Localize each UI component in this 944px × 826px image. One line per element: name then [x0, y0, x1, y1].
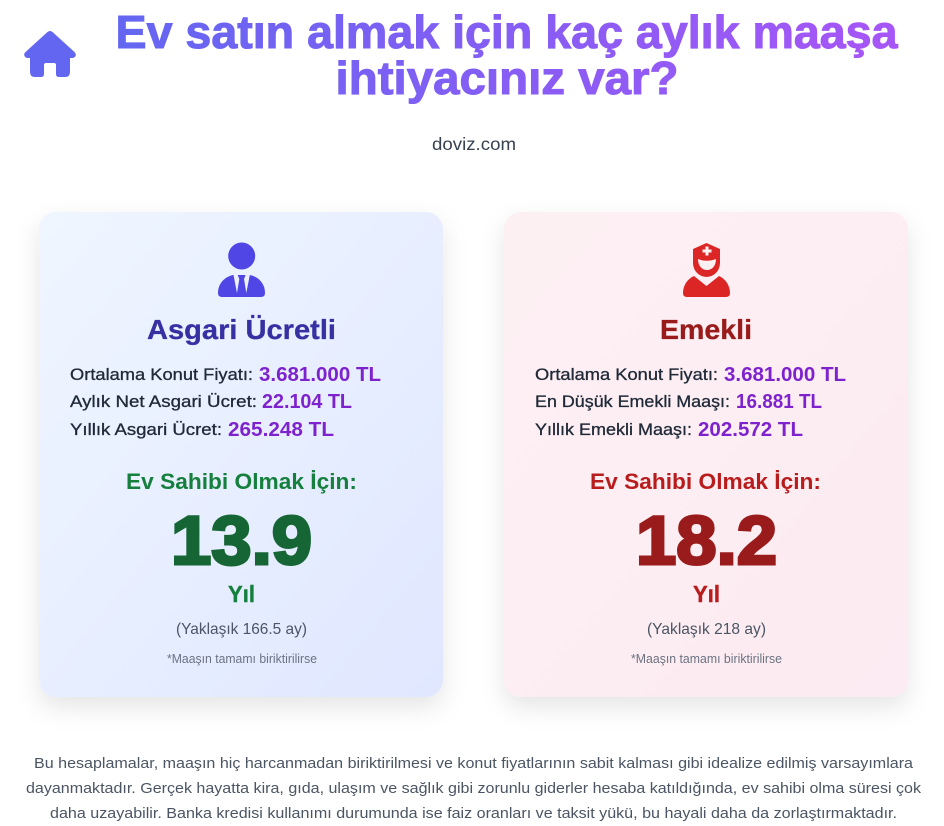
result number: 13.9 — [171, 502, 312, 579]
footer paragraph — [26, 755, 922, 822]
icon: house — [24, 31, 76, 77]
result heading: Ev Sahibi Olmak İçin: — [590, 469, 821, 494]
title: Ev satın almak için kaç aylık maaşa — [116, 6, 898, 58]
stat rows: 3.681.000 TL — [724, 364, 846, 386]
icon: nurse — [683, 243, 730, 297]
panel: emekli — [504, 212, 908, 697]
stat rows: 22.104 TL — [262, 391, 352, 413]
result unit: Yıl — [228, 581, 255, 607]
stat rows — [535, 364, 846, 441]
heading: emekli: Emekli — [660, 314, 752, 345]
stat rows — [70, 364, 381, 441]
stat rows: 16.881 TL — [736, 391, 822, 413]
footnote: *Maaşın tamamı biriktirilirse — [167, 652, 317, 666]
stat rows: 3.681.000 TL — [259, 364, 381, 386]
result number: 18.2 — [636, 502, 777, 579]
stat rows: 202.572 TL — [698, 419, 803, 441]
footer paragraph: Bu hesaplamalar, maaşın hiç harcanmadan biriktirilmesi ve konut fiyatlarının sabit kalması gibi idealize edilmiş varsayımlara — [34, 755, 914, 772]
footnote: *Maaşın tamamı biriktirilirse — [631, 652, 782, 666]
icon: businessman — [218, 242, 265, 297]
footer paragraph: daha uzayabilir. Banka kredisi kullanımı durumunda ise faiz oranları ve taksit yükü, bu hayali daha da zorlaştırmaktadır. — [50, 805, 897, 822]
months note: (Yaklaşık 166.5 ay) — [176, 621, 307, 638]
result heading: Ev Sahibi Olmak İçin: — [126, 469, 357, 494]
stat rows: En Düşük Emekli Maaşı: — [535, 393, 730, 411]
stat rows: Ortalama Konut Fiyatı: — [535, 366, 718, 384]
months note: (Yaklaşık 218 ay) — [647, 621, 766, 638]
title — [116, 6, 898, 104]
heading: asgari ücretli: Asgari Ücretli — [147, 314, 336, 345]
stat rows: Ortalama Konut Fiyatı: — [70, 366, 253, 384]
stat rows: 265.248 TL — [228, 419, 334, 441]
result unit: Yıl — [693, 581, 720, 607]
stat rows: Yıllık Asgari Ücret: — [70, 421, 222, 439]
subtitle: source: doviz.com — [432, 134, 516, 154]
panel: asgari ücretli — [39, 212, 443, 697]
stat rows: Aylık Net Asgari Ücret: — [70, 393, 257, 411]
stat rows: Yıllık Emekli Maaşı: — [535, 421, 692, 439]
title: ihtiyacınız var? — [336, 52, 678, 104]
footer paragraph: dayanmaktadır. Gerçek hayatta kira, gıda, ulaşım ve sağlık gibi zorunlu giderler hesaba katıldığında, ev sahibi olma süresi çok — [26, 780, 922, 797]
